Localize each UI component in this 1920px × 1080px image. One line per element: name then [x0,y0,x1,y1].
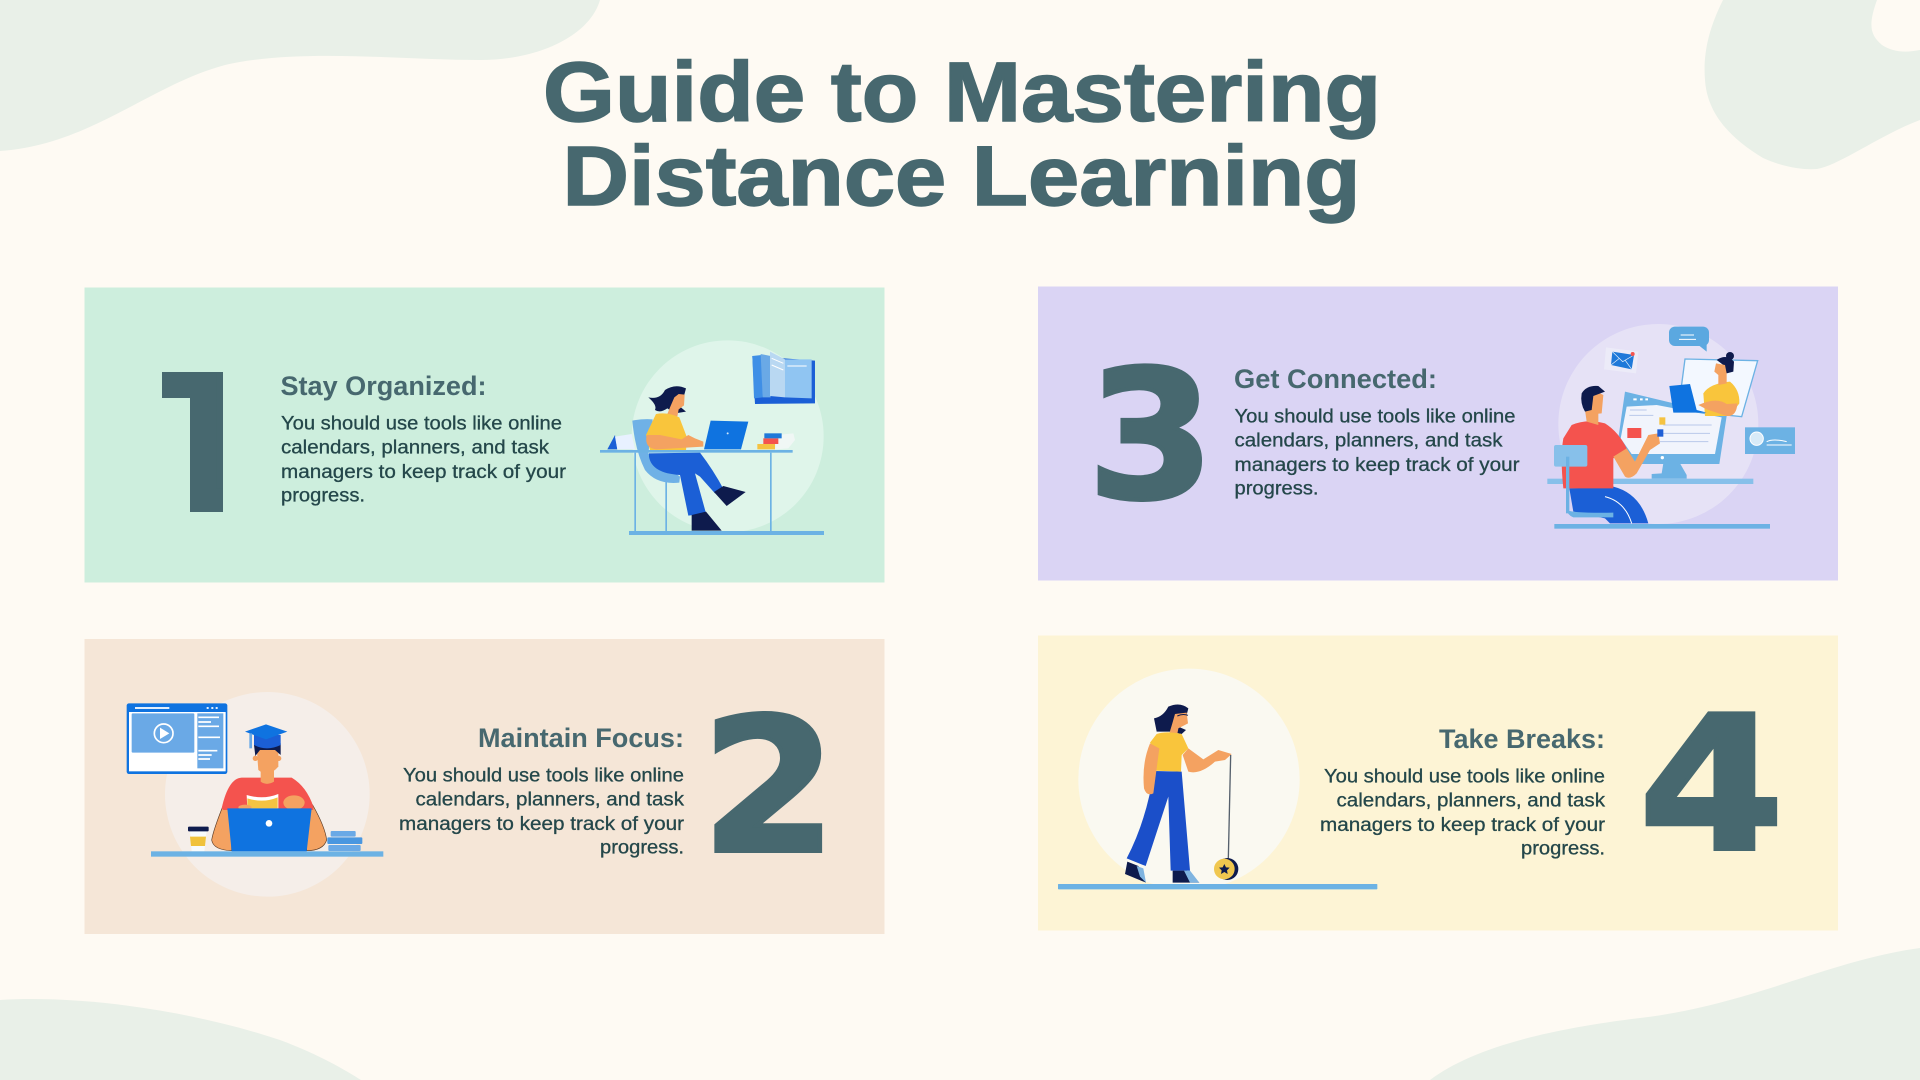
background blob: top right [1705,0,1920,169]
number 2: 2 [701,678,837,895]
number 3: 3 [1088,332,1214,540]
body text: managers to keep track of your [1320,814,1606,836]
background blob: bottom right [1430,948,1920,1080]
heading: maintain focus: Maintain Focus: [478,723,684,753]
body text: calendars, planners, and task [281,436,549,458]
illustration: woman at desk with laptop [600,340,824,535]
panel 4: take breaks [1038,636,1838,930]
panel 1: stay organized [84,288,884,582]
body text: managers to keep track of your [399,813,685,835]
body text: calendars, planners, and task [1336,790,1605,812]
heading: stay organized: Stay Organized: [280,371,486,401]
body text [1234,406,1520,500]
body text: calendars, planners, and task [1234,430,1503,452]
title [543,45,1381,223]
body text: You should use tools like online [1324,766,1605,788]
body text: You should use tools like online [281,412,562,434]
number 1: 1 [130,333,264,558]
panel 2: maintain focus [84,639,884,934]
body text: progress. [600,836,684,858]
body text: progress. [281,484,365,506]
email card [1604,347,1638,373]
globe card [1745,427,1795,454]
illustration: video call at monitor [1547,324,1795,529]
number 1 [162,372,223,512]
illustration: woman with yo-yo [1058,669,1377,890]
heading: take breaks: Take Breaks: [1439,724,1605,754]
title: Distance Learning [562,129,1360,223]
body text: managers to keep track of your [1234,454,1520,476]
background blob: bottom left [0,999,361,1080]
body text: You should use tools like online [403,764,684,786]
illustration: graduate with laptop [127,692,383,897]
icon: video window [127,703,227,774]
number 4: 4 [1638,676,1784,893]
panel 3: get connected [1038,286,1838,580]
body text [281,412,567,506]
body text [1320,766,1606,860]
icon: yo-yo [1214,858,1238,880]
body text: progress. [1521,838,1605,860]
body text: You should use tools like online [1234,406,1516,428]
icon: open book [752,352,815,404]
body text: progress. [1234,478,1318,500]
background blob: top left [0,0,600,151]
body text [399,764,685,858]
heading: get connected: Get Connected: [1234,364,1437,394]
body text: calendars, planners, and task [416,788,684,810]
speech bubble [1669,327,1709,352]
video call window [1669,352,1758,417]
body text: managers to keep track of your [281,461,567,483]
title: Guide to Mastering [543,45,1381,139]
